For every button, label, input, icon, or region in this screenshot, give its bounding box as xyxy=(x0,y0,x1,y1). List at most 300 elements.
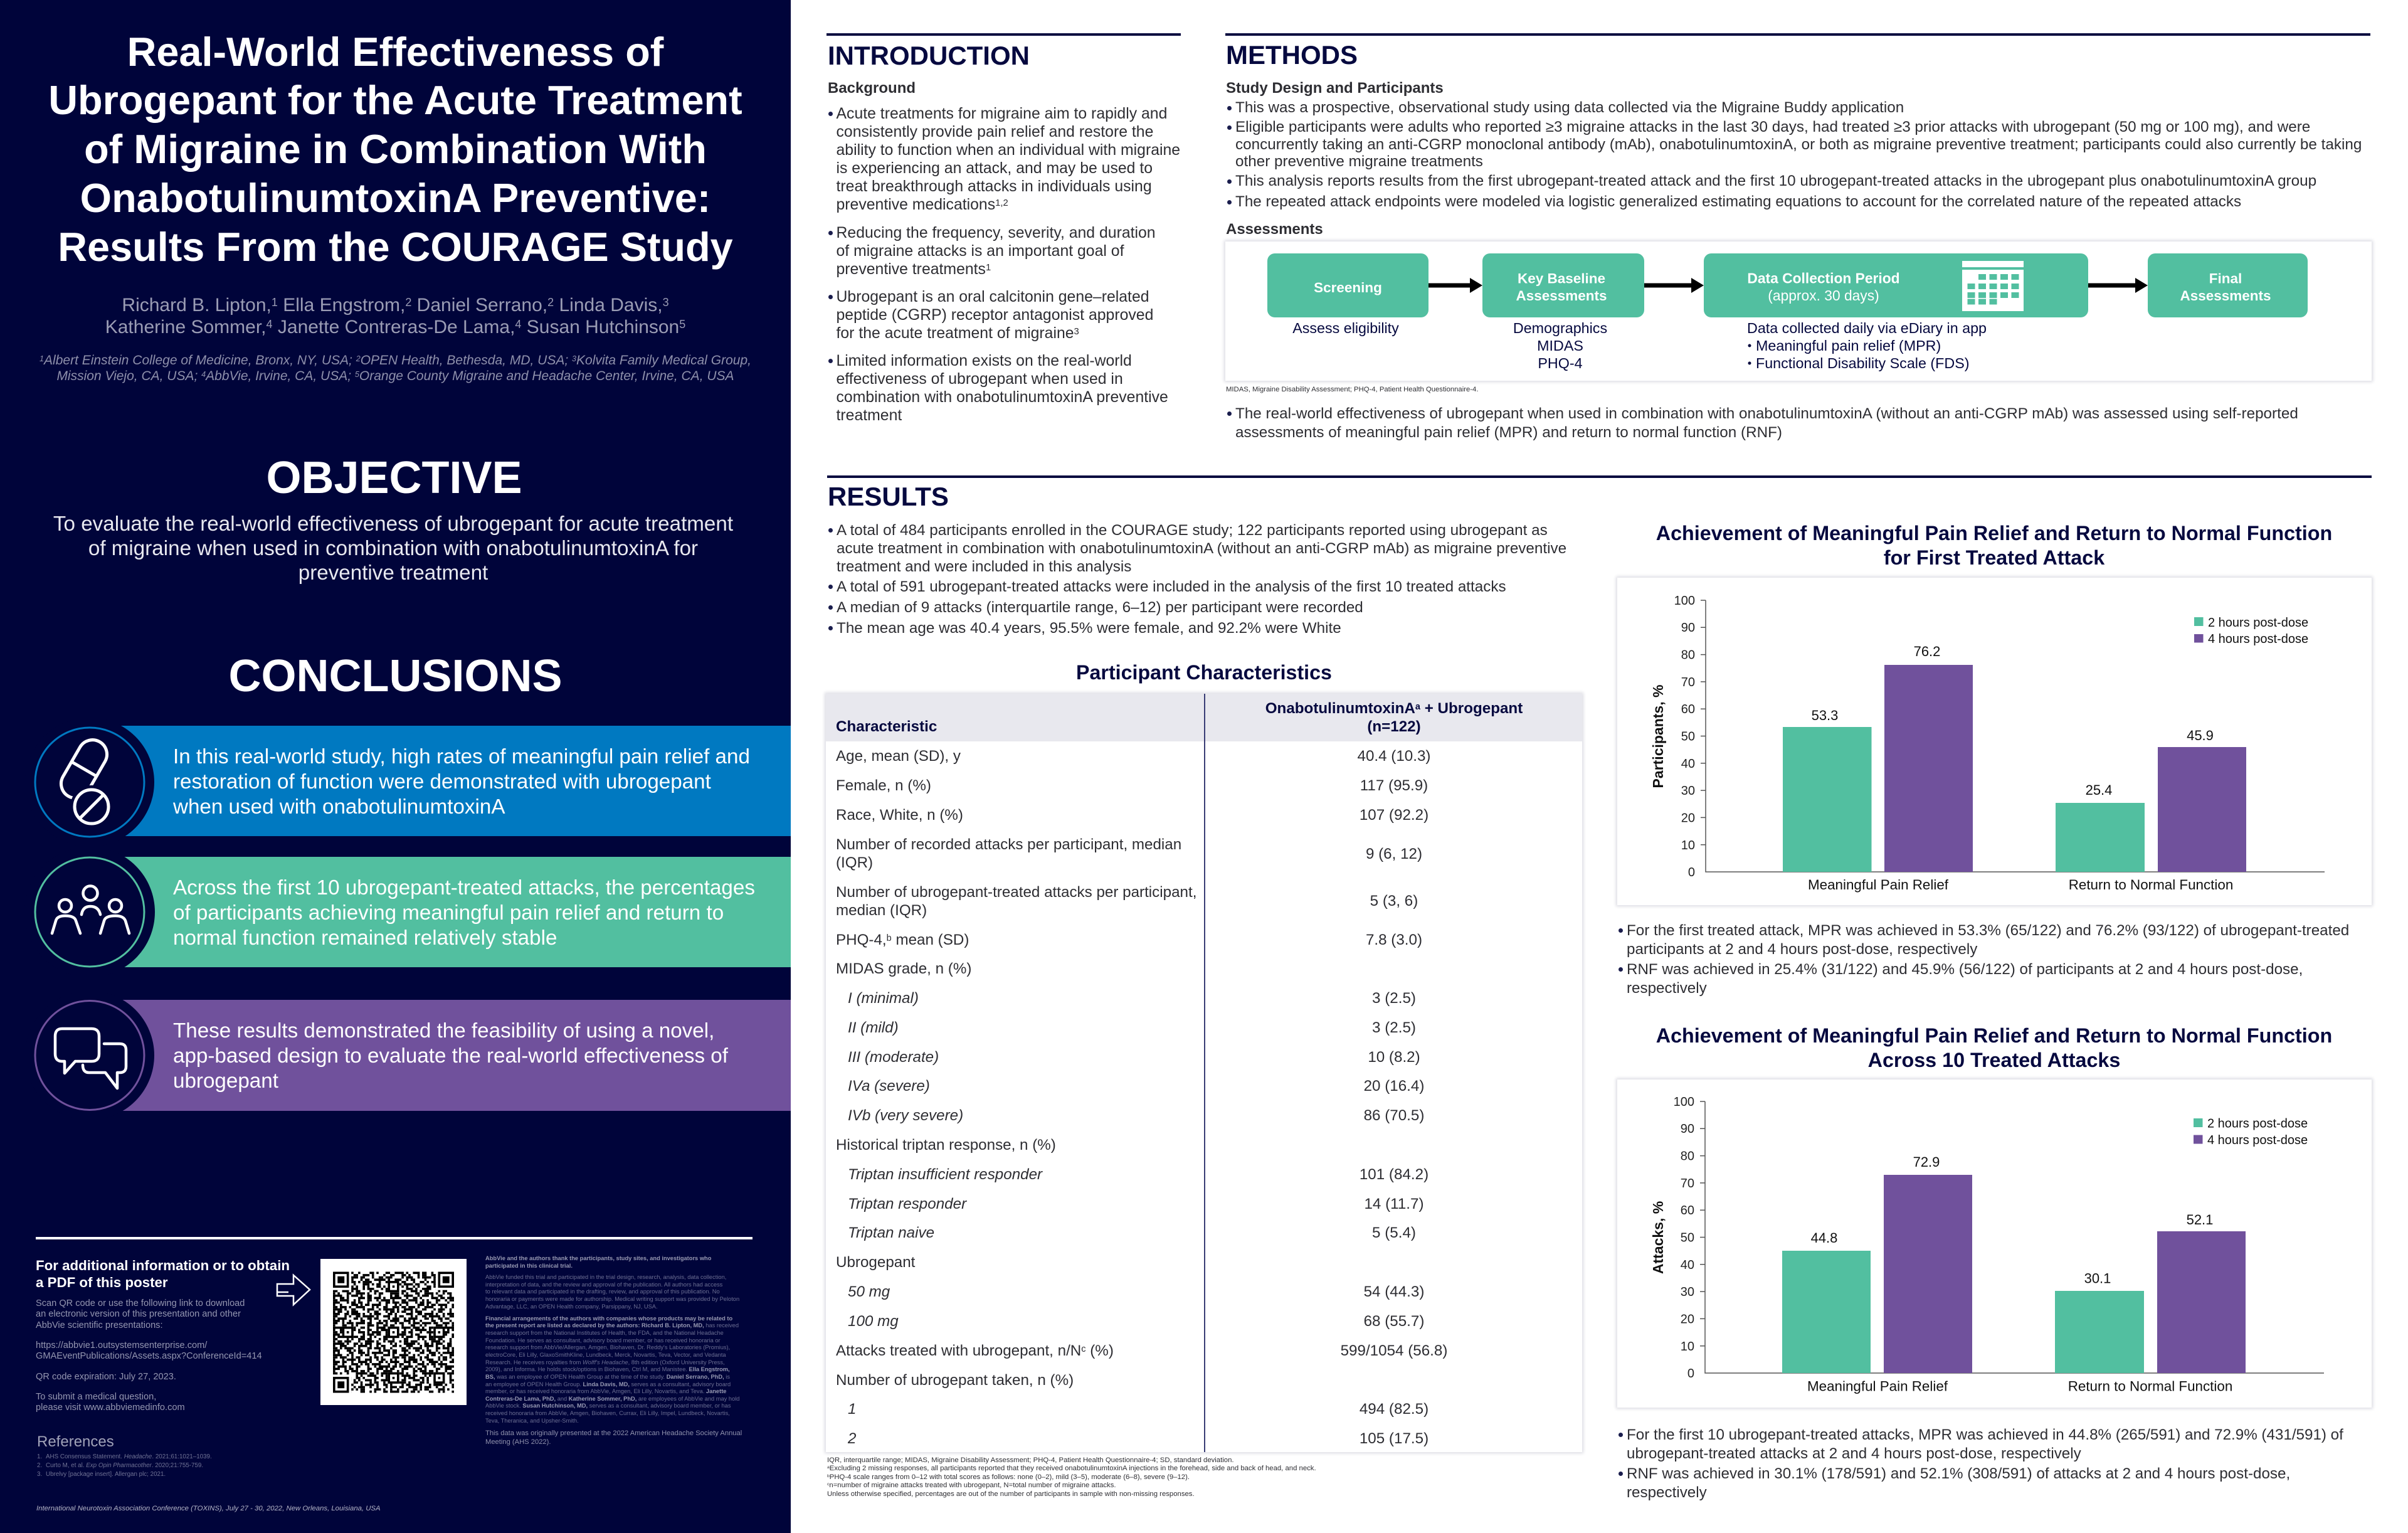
row: III moderate xyxy=(826,1048,1582,1066)
methods bullet 2: other preventive migraine treatments xyxy=(1235,153,1483,170)
QR code xyxy=(320,1259,467,1405)
row: age xyxy=(826,747,1582,765)
row: race xyxy=(826,806,1582,824)
references list: 3. xyxy=(37,1470,42,1478)
row: I minimal xyxy=(826,989,1582,1007)
financial arrangements: electroCore, Eli Lilly, GlaxoSmithKline, Lundbeck, Merck, Novartis, Teva, Vector, and Vedanta xyxy=(485,1352,726,1358)
poster link: GMAEventPublications/Assets.aspx?ConferenceId=414 xyxy=(36,1351,262,1361)
row: III moderate: 10 (8.2) xyxy=(1368,1049,1420,1066)
financial arrangements: the present report are listed as declared by the authors: Richard B. Lipton, MD, has received xyxy=(485,1322,739,1329)
medical question: To submit a medical question, xyxy=(36,1392,156,1402)
row: III moderate: III (moderate) xyxy=(848,1049,939,1066)
row: race: Race, White, n (%) xyxy=(836,807,963,824)
financial arrangements: 2009), and Informa. He holds stock/options in Biohaven, Ctrl M, and Manistee. Ella Engstrom, xyxy=(485,1366,730,1372)
step: final assessments xyxy=(2148,253,2308,317)
step: screening: Assess eligibility xyxy=(1292,320,1399,336)
row: attacks treated: Attacks treated with ubrogepant, n/Nc (%) xyxy=(836,1342,1114,1359)
row: IVb very severe xyxy=(826,1106,1582,1125)
references list: 1. xyxy=(37,1453,42,1460)
prior presentation note: This data was originally presented at the 2022 American Headache Society Annual xyxy=(485,1430,742,1437)
row: recorded attacks xyxy=(826,835,1582,872)
legend xyxy=(2194,1117,2308,1147)
y axis title: Participants, % xyxy=(1650,685,1666,788)
affiliations: Mission Viejo, CA, USA; 4AbbVie, Irvine, CA, USA; 5Orange County Migraine and Headache Center, Irvine, CA, USA xyxy=(56,369,734,383)
y axis: 90 xyxy=(1681,621,1695,635)
row: II mild: II (mild) xyxy=(848,1019,899,1036)
step: key baseline assessments: MIDAS xyxy=(1537,337,1583,354)
table footnotes: aExcluding 2 missing responses, all participants reported that they received onabotulinumtoxinA injections in the forehead, side and back of head, and neck. xyxy=(827,1465,1316,1472)
intro bullet 1: preventive medications1,2 xyxy=(837,196,1008,213)
row: triptan insufficient responder: Triptan insufficient responder xyxy=(848,1166,1042,1183)
intro bullet 4: combination with onabotulinumtoxinA preventive xyxy=(837,389,1168,405)
row: female xyxy=(826,777,1582,795)
methods bullet 1: This was a prospective, observational study using data collected via the Migraine Buddy application xyxy=(1235,99,1904,116)
objective heading: OBJECTIVE xyxy=(266,453,522,503)
row: historical triptan response: Historical triptan response, n (%) xyxy=(836,1137,1056,1154)
bars: return to normal function: 25.4 xyxy=(2086,782,2112,798)
methods heading: METHODS xyxy=(1226,40,1358,70)
thanks statement: participated in this clinical trial. xyxy=(485,1263,573,1269)
chart 1 bullet 1: For the first treated attack, MPR was achieved in 53.3% (65/122) and 76.2% (93/122) of ubrogepant-treated xyxy=(1627,922,2349,939)
step: screening: Screening xyxy=(1314,280,1382,295)
table footnotes xyxy=(827,1456,1316,1499)
step: data collection period: Functional Disability Scale (FDS) xyxy=(1756,355,1970,371)
row: triptan insufficient responder: 101 (84.2) xyxy=(1360,1166,1428,1183)
panel: introduction xyxy=(826,31,1184,433)
conclusions heading: CONCLUSIONS xyxy=(228,651,562,701)
conference footer: International Neurotoxin Association Conference (TOXINS), July 27 - 30, 2022, New Orleans, Louisiana, USA xyxy=(36,1505,381,1512)
table header: (n=122) xyxy=(1367,718,1421,735)
conclusion 1 text: when used with onabotulinumtoxinA xyxy=(173,795,505,819)
intro bullet 1: ability to function when an individual with migraine xyxy=(837,142,1180,159)
references list xyxy=(37,1453,225,1480)
step: data collection period: Data Collection Period xyxy=(1747,270,1900,286)
intro bullet 2 xyxy=(837,224,1156,278)
y axis: 60 xyxy=(1681,1204,1694,1217)
background subheading: Background xyxy=(828,80,916,97)
row: ubrogepant: Ubrogepant xyxy=(836,1254,915,1271)
intro bullet 4: effectiveness of ubrogepant when used in xyxy=(837,370,1123,388)
results bullet 2: A total of 591 ubrogepant-treated attacks were included in the analysis of the first 10 treated attacks xyxy=(837,578,1506,595)
chart 1 bullet 2: RNF was achieved in 25.4% (31/122) and 45.9% (56/122) of participants at 2 and 4 hours post-dose, xyxy=(1627,961,2303,978)
table footnotes: IQR, interquartile range; MIDAS, Migraine Disability Assessment; PHQ-4, Patient Health Questionnaire-4; SD, standard deviation. xyxy=(827,1456,1234,1464)
row: IVa severe: 20 (16.4) xyxy=(1364,1078,1424,1095)
row: one: 1 xyxy=(848,1401,856,1418)
bars: meaningful pain relief xyxy=(1783,644,1973,872)
y axis: 80 xyxy=(1681,1149,1694,1163)
row: IVb very severe: IVb (very severe) xyxy=(848,1107,963,1124)
row: age: 40.4 (10.3) xyxy=(1357,748,1430,765)
row: race: 107 (92.2) xyxy=(1360,807,1428,824)
y axis: 20 xyxy=(1681,812,1695,825)
study design subheading: Study Design and Participants xyxy=(1226,79,1444,97)
results bullet 1: A total of 484 participants enrolled in the COURAGE study; 122 participants reported using ubrogepant as xyxy=(837,522,1548,539)
conclusion 1 text: In this real-world study, high rates of meaningful pain relief and xyxy=(173,745,750,768)
y axis: 10 xyxy=(1681,839,1695,852)
bars: return to normal function: 45.9 xyxy=(2187,728,2214,743)
row: attacks treated xyxy=(826,1342,1582,1360)
icon: speech bubbles xyxy=(34,1000,791,1111)
y axis: 70 xyxy=(1681,676,1695,689)
chart 2 bullet 1 xyxy=(1627,1426,2343,1463)
conclusion 2 xyxy=(34,857,791,967)
additional information text: an electronic version of this presentation and other xyxy=(36,1309,241,1319)
authors: Richard B. Lipton,1 Ella Engstrom,2 Daniel Serrano,2 Linda Davis,3 xyxy=(122,295,669,316)
assessments flow diagram xyxy=(1225,241,2372,381)
row: recorded attacks: 9 (6, 12) xyxy=(1366,846,1422,862)
table header: OnabotulinumtoxinAa + Ubrogepant xyxy=(1265,700,1523,717)
row: 100 mg: 100 mg xyxy=(848,1313,899,1330)
medical question xyxy=(36,1392,185,1413)
methods bullet 5: The real-world effectiveness of ubrogepant when used in combination with onabotulinumtoxinA (without an anti-CGRP mAb) was assessed using self-reported xyxy=(1235,405,2298,422)
y axis: 30 xyxy=(1681,1285,1694,1299)
row: PHQ-4: 7.8 (3.0) xyxy=(1366,931,1422,948)
authors: Katherine Sommer,4 Janette Contreras-De Lama,4 Susan Hutchinson5 xyxy=(105,317,685,337)
methods bullet 5: assessments of meaningful pain relief (MPR) and return to normal function (RNF) xyxy=(1235,424,1782,441)
y axis: 20 xyxy=(1681,1312,1694,1326)
additional information text: Scan QR code or use the following link to download xyxy=(36,1298,245,1308)
poster link xyxy=(36,1340,262,1361)
affiliations: 1Albert Einstein College of Medicine, Bronx, NY, USA; 2OPEN Health, Bethesda, MD, USA; 3Kolvita Family Medical Group, xyxy=(40,353,751,368)
chart 1 bullet 1 xyxy=(1627,921,2349,959)
row: recorded attacks: (IQR) xyxy=(836,854,873,871)
conclusion 1 text: restoration of function were demonstrated with ubrogepant xyxy=(173,770,711,793)
table footnotes: Unless otherwise specified, percentages are out of the number of participants in sample with non-missing responses. xyxy=(827,1490,1195,1498)
y axis title: Attacks, % xyxy=(1650,1201,1666,1274)
references list: Ubrelvy [package insert]. Allergan plc; 2021. xyxy=(46,1470,166,1478)
row: treated attacks: median (IQR) xyxy=(836,902,927,919)
y axis: 40 xyxy=(1681,757,1695,771)
conclusion 2 text xyxy=(173,876,755,950)
chart 1 bullet 2: respectively xyxy=(1627,980,1707,997)
panel: results summary bullets xyxy=(827,521,1592,640)
methods bullet 5 xyxy=(1235,405,2298,442)
chart 2 title xyxy=(1618,1024,2370,1073)
financial arrangements: member, or has received honoraria from AbbVie, Amgen, Eli Lilly, Novartis, and Teva. Janette xyxy=(485,1388,726,1394)
y axis: 70 xyxy=(1681,1177,1694,1191)
category labels: Meaningful Pain Relief xyxy=(1807,1379,1948,1394)
chart 2 title: Across 10 Treated Attacks xyxy=(1868,1049,2120,1071)
row: two xyxy=(826,1430,1582,1448)
intro bullet 2: of migraine attacks is an important goal of xyxy=(837,243,1124,260)
bar chart: across 10 treated attacks xyxy=(1617,1079,2372,1408)
table: participant characteristics xyxy=(826,694,1582,1452)
poster link: https://abbvie1.outsystemsenterprise.com/ xyxy=(36,1340,207,1350)
chart 1 bullet 2 xyxy=(1627,960,2303,998)
step: data collection period: Meaningful pain relief (MPR) xyxy=(1756,337,1941,354)
financial arrangements xyxy=(485,1315,739,1424)
bars: meaningful pain relief: 44.8 xyxy=(1811,1230,1837,1246)
chart 1 title: for First Treated Attack xyxy=(1884,546,2104,569)
conclusion 2 text: normal function remained relatively stable xyxy=(173,926,557,950)
assessments subheading: Assessments xyxy=(1226,221,1323,238)
legend: 2 hours post-dose xyxy=(2208,616,2308,630)
row: two: 105 (17.5) xyxy=(1360,1430,1428,1447)
chart 1 title: Achievement of Meaningful Pain Relief and Return to Normal Function xyxy=(1656,522,2332,544)
row: triptan naive xyxy=(826,1224,1582,1242)
category labels: Return to Normal Function xyxy=(2069,877,2233,893)
results bullet 3: A median of 9 attacks (interquartile range, 6–12) per participant were recorded xyxy=(837,599,1363,616)
additional information text: AbbVie scientific presentations: xyxy=(36,1320,163,1330)
methods bullet 2: Eligible participants were adults who reported ≥3 migraine attacks in the last 30 days, had treated ≥3 prior attacks with ubrogepant (50 mg or 100 mg), and were xyxy=(1235,119,2310,135)
QR expiration: QR code expiration: July 27, 2023. xyxy=(36,1372,176,1382)
row: 50 mg: 50 mg xyxy=(848,1283,890,1300)
step: data collection period: Data collected daily via eDiary in app xyxy=(1747,320,1987,336)
intro bullet 1 xyxy=(837,105,1180,214)
icon: arrow to QR code xyxy=(276,1273,311,1307)
bars: meaningful pain relief xyxy=(1782,1154,1972,1373)
row: female: Female, n (%) xyxy=(836,777,931,794)
row: triptan naive: Triptan naive xyxy=(848,1224,934,1241)
assessments footnote: MIDAS, Migraine Disability Assessment; PHQ-4, Patient Health Questionnaire-4. xyxy=(1226,385,1478,393)
bars: return to normal function xyxy=(2056,728,2246,872)
step: key baseline assessments: Assessments xyxy=(1516,288,1607,304)
results bullet 4: The mean age was 40.4 years, 95.5% were female, and 92.2% were White xyxy=(837,620,1341,637)
arrow: data collection to final xyxy=(2088,278,2148,293)
title: Results From the COURAGE Study xyxy=(58,224,733,270)
legend: 2 hours post-dose xyxy=(2207,1117,2308,1130)
bars: meaningful pain relief: 53.3 xyxy=(1812,708,1838,723)
y axis: 30 xyxy=(1681,784,1695,798)
chart 2 bullet 2: respectively xyxy=(1627,1484,1707,1501)
methods bullet 2: concurrently taking an anti-CGRP monoclonal antibody (mAb), onabotulinumtoxinA, or both as migraine preventive treatment; participants could also currently be taking xyxy=(1235,135,2362,153)
legend: 4 hours post-dose xyxy=(2207,1133,2308,1147)
funding statement: honoraria or payments were made for authorship. Medical writing support was provided by Peloton xyxy=(485,1296,739,1302)
step: key baseline assessments xyxy=(1482,253,1644,371)
title: Ubrogepant for the Acute Treatment xyxy=(48,77,742,123)
financial arrangements: Research. He receives royalties from Wolff's Headache, 8th edition (Oxford University Press, xyxy=(485,1359,725,1366)
chart 2 bullets xyxy=(1618,1426,2370,1504)
acknowledgements and disclosures xyxy=(485,1255,742,1446)
objective text: of migraine when used in combination with onabotulinumtoxinA for xyxy=(88,537,698,560)
funding statement xyxy=(485,1274,739,1310)
row: PHQ-4 xyxy=(826,931,1582,949)
chart 2 bullet 2 xyxy=(1627,1465,2290,1502)
row: 100 mg: 68 (55.7) xyxy=(1364,1313,1424,1330)
icon: people xyxy=(34,857,791,967)
y axis: 100 xyxy=(1674,1095,1694,1109)
step: data collection period: (approx. 30 days) xyxy=(1768,287,1879,304)
intro bullet 4: treatment xyxy=(837,406,902,424)
row: female: 117 (95.9) xyxy=(1360,777,1428,794)
y axis: 40 xyxy=(1681,1258,1694,1272)
row: IVa severe xyxy=(826,1077,1582,1095)
category labels: Meaningful Pain Relief xyxy=(1808,877,1949,893)
results bullet 1: treatment and were included in this analysis xyxy=(837,558,1131,575)
row: 50 mg xyxy=(826,1283,1582,1301)
authors xyxy=(105,295,685,337)
affiliations xyxy=(40,353,751,383)
methods bullet 2 xyxy=(1235,119,2362,171)
prior presentation note xyxy=(485,1429,742,1446)
conclusion 2 text: of participants achieving meaningful pain relief and return to xyxy=(173,901,724,925)
row: I minimal: I (minimal) xyxy=(848,990,919,1007)
legend xyxy=(2194,616,2308,646)
row: two: 2 xyxy=(848,1430,856,1447)
row: II mild xyxy=(826,1019,1582,1037)
row: triptan responder xyxy=(826,1195,1582,1213)
bars: return to normal function: 52.1 xyxy=(2187,1212,2213,1228)
financial arrangements: research support from the National Institutes of Health, the FDA, and the National Headache xyxy=(485,1330,724,1336)
intro bullet 4: Limited information exists on the real-world xyxy=(837,353,1132,369)
row: recorded attacks: Number of recorded attacks per participant, median xyxy=(836,836,1181,853)
row: 100 mg xyxy=(826,1312,1582,1330)
y axis: 80 xyxy=(1681,649,1695,662)
financial arrangements: Teva, Theranica, and Upsher-Smith. xyxy=(485,1418,579,1424)
table title: Participant Characteristics xyxy=(1076,661,1332,684)
arrow: baseline to data collection xyxy=(1644,278,1704,293)
objective text xyxy=(53,512,733,585)
conclusion 1 xyxy=(34,726,791,838)
y axis xyxy=(1674,1095,2324,1381)
row: II mild: 3 (2.5) xyxy=(1372,1019,1416,1036)
row: one xyxy=(826,1400,1582,1418)
y axis: 0 xyxy=(1687,1367,1694,1381)
intro bullet 1: is experiencing an attack, and may be used to xyxy=(837,160,1153,177)
row: PHQ-4: PHQ-4,b mean (SD) xyxy=(836,931,969,948)
row: MIDAS grade: MIDAS grade, n (%) xyxy=(836,960,971,977)
y axis: 90 xyxy=(1681,1122,1694,1136)
y axis: 60 xyxy=(1681,703,1695,716)
conclusion 3 text: app-based design to evaluate the real-world effectiveness of xyxy=(173,1044,728,1068)
icon: calendar xyxy=(1962,261,2024,311)
financial arrangements: Financial arrangements of the authors with companies whose products may be related to xyxy=(485,1315,732,1322)
financial arrangements: received honoraria from AbbVie, Amgen, Biohaven, Currax, Eli Lilly, Impel, Lundbeck, Novartis, xyxy=(485,1410,730,1416)
additional information heading: a PDF of this poster xyxy=(36,1275,168,1290)
methods bullet 4: The repeated attack endpoints were modeled via logistic generalized estimating equations to account for the correlated nature of the repeated attacks xyxy=(1235,193,2241,210)
step: screening xyxy=(1267,253,1428,336)
row: triptan responder: Triptan responder xyxy=(848,1196,966,1212)
medical question: please visit www.abbviemedinfo.com xyxy=(36,1403,185,1413)
financial arrangements: Contreras-De Lama, PhD, and Katherine Sommer, PhD, are employees of AbbVie and may hold xyxy=(485,1396,739,1402)
references list: Curto M, et al. Exp Opin Pharmacother. 2020;21:755-759. xyxy=(46,1461,203,1469)
row: 50 mg: 54 (44.3) xyxy=(1364,1283,1424,1300)
funding statement: AbbVie funded this trial and participated in the trial design, research, analysis, data collection, xyxy=(485,1274,726,1280)
row: one: 494 (82.5) xyxy=(1360,1401,1428,1418)
bar chart: first treated attack xyxy=(1617,578,2372,905)
table header: Characteristic xyxy=(836,718,937,735)
financial arrangements: research support from AbbVie/Allergan, Amgen, Biohaven, Dr. Reddy's Laboratories (Promius), xyxy=(485,1344,730,1350)
step: final assessments: Final xyxy=(2209,271,2242,286)
intro bullet 3: peptide (CGRP) receptor antagonist approved xyxy=(837,307,1153,324)
row: age: Age, mean (SD), y xyxy=(836,748,961,765)
row: triptan naive: 5 (5.4) xyxy=(1372,1224,1416,1241)
row: treated attacks xyxy=(826,883,1582,920)
intro bullet 4 xyxy=(837,351,1168,424)
step: final assessments: Assessments xyxy=(2180,288,2271,304)
additional information heading xyxy=(36,1258,290,1290)
prior presentation note: Meeting (AHS 2022). xyxy=(485,1438,551,1446)
chart 2 title: Achievement of Meaningful Pain Relief and Return to Normal Function xyxy=(1656,1024,2332,1047)
table header xyxy=(826,694,1582,741)
conclusion 1 text xyxy=(173,745,750,819)
intro bullet 3: Ubrogepant is an oral calcitonin gene–related xyxy=(837,289,1149,305)
conclusion 3 xyxy=(34,1000,791,1111)
category labels: Return to Normal Function xyxy=(2068,1379,2232,1394)
references list: 2. xyxy=(37,1461,42,1469)
bars: meaningful pain relief: 76.2 xyxy=(1914,644,1940,659)
chart 2 bullet 1: ubrogepant-treated attacks at 2 and 4 hours post-dose, respectively xyxy=(1627,1445,2081,1462)
objective text: To evaluate the real-world effectiveness of ubrogepant for acute treatment xyxy=(53,512,733,536)
chart 1 bullet 1: participants at 2 and 4 hours post-dose, respectively xyxy=(1627,941,1977,958)
introduction heading: INTRODUCTION xyxy=(828,41,1030,70)
methods bullet 3: This analysis reports results from the first ubrogepant-treated attack and the first 10 ubrogepant-treated attacks in the ubrogepant plus onabotulinumtoxinA group xyxy=(1235,172,2316,189)
intro bullet 3 xyxy=(837,288,1153,342)
intro bullet 3: for the acute treatment of migraine3 xyxy=(837,325,1079,342)
row: IVa severe: IVa (severe) xyxy=(848,1078,930,1095)
chart 2 bullet 1: For the first 10 ubrogepant-treated attacks, MPR was achieved in 44.8% (265/591) and 72.9% (431/591) of xyxy=(1627,1426,2343,1443)
row: I minimal: 3 (2.5) xyxy=(1372,990,1416,1007)
table footnotes: bPHQ-4 scale ranges from 0–12 with total scores as follows: none (0–2), mild (3–5), moderate (6–8), severe (9–12). xyxy=(827,1473,1190,1481)
y axis: 50 xyxy=(1681,730,1695,744)
funding statement: to relevant data and participated in the drafting, review, and approval of this publication. No xyxy=(485,1288,720,1295)
references list: AHS Consensus Statement. Headache. 2021;61:1021–1039. xyxy=(46,1453,212,1460)
y axis: 0 xyxy=(1688,866,1695,879)
funding statement: Advantage, LLC, an OPEN Health company, Parsippany, NJ, USA. xyxy=(485,1303,658,1310)
funding statement: interpretation of data, and the review and approval of the publication. All authors had access xyxy=(485,1281,722,1288)
financial arrangements: BS, was an employee of OPEN Health Group at the time of the study. Daniel Serrano, PhD, is xyxy=(485,1374,730,1380)
results bullet 1 xyxy=(837,521,1566,576)
bars: return to normal function xyxy=(2055,1212,2246,1373)
bars: return to normal function: 30.1 xyxy=(2084,1271,2111,1286)
icon: pill xyxy=(34,726,791,838)
bars: meaningful pain relief: 72.9 xyxy=(1913,1154,1940,1170)
step: key baseline assessments: Key Baseline xyxy=(1518,271,1605,286)
conclusion 3 text xyxy=(173,1019,729,1093)
results bullet 1: acute treatment in combination with onabotulinumtoxinA (without an anti-CGRP mAb) as migraine preventive xyxy=(837,540,1566,557)
row: attacks treated: 599/1054 (56.8) xyxy=(1341,1342,1447,1359)
category labels xyxy=(1808,877,2233,893)
title xyxy=(48,29,742,270)
row: triptan insufficient responder xyxy=(826,1165,1582,1184)
conclusion 3 text: ubrogepant xyxy=(173,1069,278,1093)
intro bullet 2: preventive treatments1 xyxy=(837,261,991,278)
title: of Migraine in Combination With xyxy=(84,126,707,172)
y axis xyxy=(1674,594,2325,879)
additional information text xyxy=(36,1298,245,1330)
references heading: References xyxy=(37,1433,114,1450)
objective text: preventive treatment xyxy=(298,561,488,585)
intro bullet 1: consistently provide pain relief and restore the xyxy=(837,124,1153,141)
left navy panel xyxy=(0,0,791,1533)
panel: methods xyxy=(1225,31,2373,448)
conclusion 3 text: These results demonstrated the feasibility of using a novel, xyxy=(173,1019,714,1042)
title: OnabotulinumtoxinA Preventive: xyxy=(80,175,710,221)
financial arrangements: AbbVie stock. Susan Hutchinson, MD, serves as a consultant, advisory board member, or has xyxy=(485,1403,731,1409)
additional information heading: For additional information or to obtain xyxy=(36,1258,290,1273)
y axis: 10 xyxy=(1681,1340,1694,1354)
step: key baseline assessments: Demographics xyxy=(1513,320,1607,336)
chart 2 bullet 2: RNF was achieved in 30.1% (178/591) and 52.1% (308/591) of attacks at 2 and 4 hours post-dose, xyxy=(1627,1465,2290,1482)
financial arrangements: Foundation. He serves as consultant, advisory board member, or has received honoraria or xyxy=(485,1337,721,1344)
table footnotes: cn=number of migraine attacks treated with ubrogepant, N=total number of migraine attacks. xyxy=(827,1482,1116,1489)
step: key baseline assessments: PHQ-4 xyxy=(1538,355,1583,371)
thanks statement: AbbVie and the authors thank the participants, study sites, and investigators who xyxy=(485,1255,711,1261)
legend: 4 hours post-dose xyxy=(2208,632,2308,646)
row: treated attacks: Number of ubrogepant-treated attacks per participant, xyxy=(836,884,1196,901)
title: Real-World Effectiveness of xyxy=(127,29,663,75)
chart 1 bullets xyxy=(1618,922,2370,1000)
row: triptan responder: 14 (11.7) xyxy=(1364,1196,1423,1212)
row: treated attacks: 5 (3, 6) xyxy=(1370,893,1418,910)
step: data collection period xyxy=(1704,253,2088,371)
row: number of ubrogepant taken: Number of ubrogepant taken, n (%) xyxy=(836,1372,1074,1389)
y axis: 100 xyxy=(1674,594,1695,608)
chart 1 title xyxy=(1618,521,2370,570)
intro bullet 1: Acute treatments for migraine aim to rapidly and xyxy=(837,105,1167,122)
intro bullet 1: treat breakthrough attacks in individuals using xyxy=(837,178,1152,195)
results heading: RESULTS xyxy=(828,482,949,511)
